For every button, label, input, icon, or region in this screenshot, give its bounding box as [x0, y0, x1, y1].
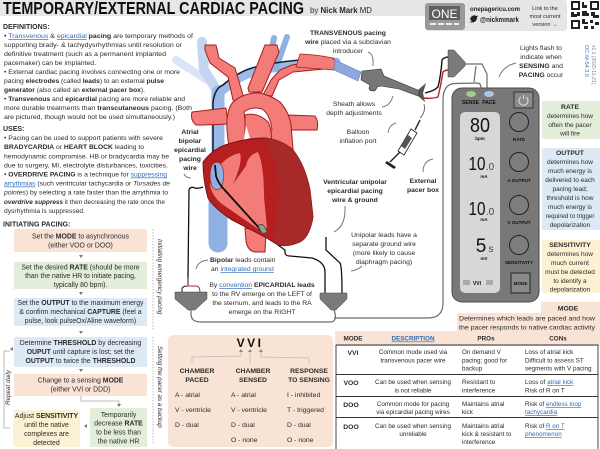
- row: DOO: DOO: [343, 402, 359, 409]
- flow box: adjust sensitivity: Adjust SENSITIVITY: [15, 413, 78, 420]
- row: DDD: phenomenon: [525, 431, 562, 438]
- row: DDD: Can be used when sensing: [375, 423, 451, 430]
- panel: output: [542, 148, 600, 230]
- panel: output: required to trigger: [546, 213, 594, 220]
- row: VOO: Resistant to: [462, 379, 496, 386]
- mode button: MODE: [514, 281, 527, 286]
- label: atrial bipolar wire: Atrial: [181, 129, 199, 136]
- flow box: change mode: (either VVI or DDD): [51, 386, 110, 394]
- table header: DESCRIPTION: [391, 336, 435, 342]
- row: VOO: is not reliable: [394, 388, 432, 394]
- side label: setting pacer as a backup: [153, 337, 163, 445]
- panel: output: pacing lead;: [552, 186, 588, 193]
- knob: sensitivity: SENSITIVITY: [505, 260, 533, 265]
- column: response to sensing: I - inhibited: [287, 392, 320, 399]
- label: convention epicardial: the sternum, and leads to the RA: [212, 300, 312, 307]
- pacer box: [452, 88, 539, 302]
- label: ventricular unipolar: epicardial pacing: [327, 188, 383, 195]
- row: DOO: tachycardia: [525, 409, 558, 416]
- panel: mode: Determines which leads are paced and how: [459, 316, 595, 322]
- panel: rate: determines how: [547, 113, 593, 120]
- row: VVI: transvenous pacer wire: [380, 358, 446, 364]
- flow box: set output: pulse, look pulseOx/Aline waveform): [25, 318, 136, 325]
- column: response to sensing: D - dual: [287, 422, 311, 429]
- knob: rate: RATE: [513, 137, 525, 142]
- panel: mode: the pacer responds to native cardiac activity: [459, 324, 596, 332]
- table header: CONs: [549, 336, 567, 342]
- flow arrows: [4, 255, 121, 428]
- row: DOO: Common mode for pacing: [377, 401, 450, 408]
- knob: v output: V OUTPUT: [507, 220, 531, 225]
- flow box: decrease rate: the native HR: [98, 438, 139, 446]
- version text: OC-M-54.3.0: [583, 45, 589, 77]
- row: VOO: interference: [462, 388, 496, 394]
- label: sheath: Sheath allows: [333, 101, 376, 108]
- column: response to sensing: T - triggered: [287, 407, 324, 414]
- row: DDD: unreliable: [399, 431, 427, 438]
- flow box: decrease rate: decrease RATE: [94, 420, 143, 428]
- row: DDD: interference: [462, 439, 496, 446]
- knob: rate: [510, 112, 528, 142]
- display: VVI: [473, 281, 482, 287]
- display: mV: [480, 256, 488, 261]
- text block: uses: overdrive suppress it then decreasing the rate once the: [4, 199, 165, 206]
- label: unipolar leads: diaphragm pacing): [356, 259, 412, 266]
- label: sheath: depth adjustments: [326, 110, 382, 117]
- row: DDD: Maintains atrial: [462, 423, 504, 430]
- power button: [514, 92, 533, 108]
- flow box: change mode: Change to a sensing MODE: [38, 378, 124, 384]
- side label: setting pacer as a backup: Setting the pacer as a backup: [156, 346, 163, 428]
- display: mA: [480, 217, 488, 222]
- column: response to sensing: O - none: [287, 437, 314, 444]
- label: convention epicardial: By convention EPICARDIAL leads: [209, 282, 315, 289]
- illustration: heart: [203, 138, 313, 246]
- text block: uses: BRADYCARDIA or HEART BLOCK leading to: [4, 144, 144, 151]
- display: 5: [476, 236, 486, 257]
- panel: VVI code: [168, 335, 333, 447]
- display: [460, 112, 500, 293]
- knob: a output: [507, 152, 531, 183]
- flow box: set rate: typically 80 bpm).: [54, 282, 107, 289]
- row: DOO: Risk of endless loop: [525, 401, 582, 408]
- flow box: set output: [14, 298, 147, 326]
- text block: uses: • OVERDRIVE PACING is a technique for suppressing: [4, 172, 167, 178]
- main gray cable loop: [191, 64, 487, 322]
- label: atrial bipolar wire: [174, 129, 206, 178]
- table header: MODE: [344, 336, 362, 342]
- row: DDD: DOO: [343, 424, 359, 431]
- text block: definitions: more durable treatments than transcutaneous pacing. (Both: [4, 105, 192, 112]
- label: sheath: [326, 96, 393, 117]
- row: VOO: [343, 379, 574, 394]
- link text: version →: [532, 22, 558, 28]
- text block: definitions: • Transvenous & epicardial pacing are temporary methods of: [4, 33, 193, 40]
- panel: sensitivity: SENSITIVITY: [549, 242, 591, 249]
- column: response to sensing: [287, 368, 330, 444]
- mode button: [511, 273, 530, 293]
- row: DOO: Maintains atrial: [462, 401, 504, 408]
- panel: output: determines how: [547, 159, 593, 166]
- label: external pacer box: pacer box: [407, 187, 439, 194]
- pace light: PACE: [482, 100, 496, 106]
- label: bipolar leads: [196, 257, 276, 273]
- flow box: decrease rate: Temporarily: [101, 412, 137, 419]
- panel: rate: [542, 101, 600, 139]
- flow box: determine threshold: OUTPUT to twice the THRESHOLD: [26, 358, 135, 365]
- column: chamber sensed: D - dual: [231, 422, 255, 429]
- panel: rate: often the pacer: [548, 122, 593, 129]
- label: lights flash: Lights flash to: [520, 45, 562, 52]
- label: bipolar leads: an integrated ground: [211, 266, 274, 273]
- panel: sensitivity: depolarization: [550, 286, 591, 294]
- text block: definitions: DEFINITIONS:: [3, 24, 50, 31]
- row: DDD: Risk of R on T: [525, 423, 565, 430]
- header band: [0, 0, 567, 31]
- row: DOO: [343, 401, 582, 416]
- flow box: decrease rate: [90, 408, 147, 447]
- panel: output: OUTPUT: [556, 150, 585, 157]
- label: atrial bipolar wire: epicardial: [174, 147, 206, 154]
- table header: [344, 336, 567, 342]
- website and twitter handle: @nickmmark: [480, 17, 519, 24]
- illustration: sheath and connector: [296, 50, 465, 118]
- sense light: [462, 91, 480, 106]
- column: response to sensing: RESPONSE: [290, 368, 328, 375]
- column: chamber sensed: O - none: [231, 437, 258, 444]
- table: modes: [336, 336, 598, 449]
- column: chamber paced: V - ventricle: [175, 407, 211, 414]
- text block: definitions: generator (also called an external pacer box).: [4, 87, 145, 94]
- label: external pacer box: [407, 159, 439, 194]
- heading: initiating pacing: INITIATING PACING:: [3, 222, 70, 228]
- row: VVI: Common mode used via: [379, 349, 448, 356]
- text block: uses: due to surgery, MI, electrolyte disturbances, toxicities.: [4, 162, 168, 170]
- row: VOO: Risk of R on T: [525, 388, 565, 394]
- column: chamber sensed: A - atrial: [231, 392, 256, 399]
- text block: uses: • Pacing can be used to support patients with severe: [4, 135, 163, 142]
- knob: sensitivity: [505, 236, 533, 265]
- label: ventricular unipolar: wire & ground: [331, 197, 378, 204]
- flow box: decrease rate: to be less than: [96, 430, 141, 436]
- labels: transvenous wire: wire placed via a subclavian: [304, 39, 391, 46]
- website and twitter handle: onepagericu.com: [470, 6, 520, 13]
- label: balloon port: Balloon: [347, 129, 370, 136]
- panel: output: delivered to each: [545, 177, 595, 184]
- column: chamber sensed: SENSED: [239, 377, 267, 384]
- label: bipolar leads: Bipolar leads contain: [210, 257, 276, 264]
- column: chamber sensed: [231, 368, 270, 444]
- label: atrial bipolar wire: wire: [182, 165, 197, 172]
- connector: right lead: [320, 293, 347, 310]
- label: convention epicardial: emerge on the RIGHT: [229, 309, 295, 316]
- label: external pacer box: External: [410, 178, 437, 185]
- panel: mode: [335, 302, 600, 346]
- pace light: [482, 91, 496, 106]
- display: 80: [470, 115, 490, 137]
- connector: left lead: [175, 277, 207, 310]
- text block: definitions: are pictured, though would not be used simultaneously.): [4, 114, 175, 121]
- label: unipolar leads: separate ground wire: [352, 241, 416, 248]
- display: 10: [468, 199, 486, 219]
- badge: ONE: ONE: [431, 7, 458, 21]
- column: chamber paced: CHAMBER: [180, 368, 214, 375]
- text block: uses: hemodynamic compromise. HB or bradycardia may be: [4, 154, 169, 160]
- flow box: determine threshold: OUPUT until capture is lost; set the: [27, 349, 134, 356]
- row: VVI: [348, 349, 592, 372]
- website and twitter handle: [469, 6, 520, 24]
- row: VOO: VOO: [343, 380, 359, 387]
- side label: initiating emergency pacing: [153, 229, 163, 330]
- flow box: set output: & confirm mechanical CAPTURE (feel a: [19, 309, 142, 316]
- text block: uses: pointes) by selecting a rate faster than the arrythmia to: [3, 190, 168, 196]
- display: 10: [468, 154, 486, 174]
- illustration: vessel under heart: [245, 228, 266, 252]
- column: chamber paced: D - dual: [175, 422, 199, 429]
- text block: definitions: definitive treatment (such as a permanent implanted: [4, 51, 166, 58]
- table header: PROs: [477, 336, 495, 342]
- row: VVI: pacing; good for: [462, 358, 507, 364]
- row: VOO: Can be used when sensing: [375, 379, 451, 386]
- flow box: adjust sensitivity: detected: [33, 440, 60, 447]
- label: lights flash: PACING occur: [519, 72, 564, 79]
- illustration: great vessels: [192, 45, 336, 160]
- row: VVI: VVI: [348, 350, 359, 357]
- label: ventricular unipolar: [323, 179, 387, 232]
- ventricular wire to connector: [278, 245, 325, 293]
- panel: rate: will fire: [559, 130, 580, 138]
- display: bpm: [475, 136, 485, 141]
- text block: definitions: pacing electrodes (called leads) to an external pulse: [4, 78, 164, 85]
- text block: definitions: • External cardiac pacing involves connecting one or more: [4, 69, 180, 76]
- labels: transvenous wire: [304, 30, 391, 66]
- row: VOO: Loss of atrial kick: [525, 379, 574, 386]
- panel: mode: MODE: [558, 306, 579, 312]
- text block: definitions: pacemaker) can be implanted.: [4, 60, 96, 67]
- flow box: adjust sensitivity: [13, 410, 80, 447]
- column: chamber paced: PACED: [185, 377, 209, 384]
- flow box: set mode: Set the MODE to asynchronous: [32, 234, 130, 240]
- label: balloon port: inflation port: [339, 138, 377, 145]
- row: DDD: kick & resistant to: [462, 431, 512, 438]
- row: DDD: [343, 423, 565, 446]
- link text: most current: [529, 14, 561, 20]
- row: VVI: On demand V: [462, 349, 502, 356]
- labels: transvenous wire: introducer: [333, 48, 364, 55]
- display: .0: [486, 162, 495, 173]
- panel: sensitivity: much current: [551, 260, 589, 267]
- display: .0: [486, 207, 495, 218]
- row: VVI: segments with V pacing: [525, 366, 592, 372]
- flow box: set rate: Set the desired RATE (should be more: [21, 264, 140, 272]
- flow box: change mode: [14, 374, 147, 396]
- column: response to sensing: TO SENSING: [288, 377, 330, 384]
- knob: a output: A OUTPUT: [507, 178, 531, 183]
- flow box: set mode: [14, 229, 147, 252]
- author byline: by Nick Mark MD: [310, 6, 372, 15]
- flow box: set rate: than the native HR to initiate pacing,: [25, 273, 136, 280]
- label: unipolar leads: Unipolar leads have a: [351, 232, 417, 239]
- text block: uses: USES:: [3, 126, 24, 133]
- label: convention epicardial: [209, 282, 315, 316]
- ventricular ground wire: [326, 237, 342, 293]
- row: DOO: kick: [462, 409, 474, 416]
- illustration: transvenous wire in vein: [213, 60, 300, 170]
- flow box: set mode: (either VOO or DOO): [48, 242, 113, 250]
- atrial epicardial wire to connector: [188, 187, 203, 277]
- column: chamber sensed: V - ventricle: [231, 407, 267, 414]
- panel: sensitivity: [542, 240, 600, 294]
- label: lights flash: SENSING and: [519, 63, 563, 70]
- column: chamber sensed: CHAMBER: [236, 368, 270, 375]
- panel: VVI code: VVI: [237, 336, 263, 350]
- panel: rate: RATE: [561, 104, 579, 111]
- column: chamber paced: A - atrial: [175, 392, 200, 399]
- row: VVI: Difficult to assess ST: [525, 358, 584, 364]
- version text: v1.1 (2020-11-21): [590, 45, 596, 85]
- knob: v output: [507, 196, 531, 225]
- link text: Link to the: [532, 6, 558, 12]
- panel: sensitivity: to identify a: [553, 278, 587, 285]
- display: s: [488, 244, 494, 255]
- flow box: set output: Set the OUTPUT to the maximum energy: [17, 300, 144, 307]
- text block: definitions: [3, 24, 193, 121]
- label: convention epicardial: to the RV emerge on the LEFT of: [212, 291, 312, 298]
- badge: ONE: [425, 3, 465, 30]
- text block: definitions: • Transvenous and epicardial pacing are more reliable and: [4, 96, 185, 103]
- label: lights flash: [499, 45, 564, 79]
- text block: uses: arrythmias (such ventricular tachycardia or Torsades de: [4, 180, 170, 188]
- panel: sensitivity: must be detected: [545, 269, 595, 276]
- display: mA: [480, 174, 488, 179]
- label: balloon port: [339, 123, 396, 145]
- link text: [529, 6, 561, 28]
- QR code: [570, 0, 600, 30]
- panel: output: much energy is: [548, 168, 593, 175]
- illustration: syringe: [385, 120, 420, 169]
- sense light: SENSE: [462, 100, 480, 106]
- row: VVI: Loss of atrial kick: [525, 349, 574, 356]
- panel: output: threshold is how: [547, 195, 594, 202]
- side label: initiating emergency pacing: Initiating emergency pacing: [156, 239, 163, 315]
- label: lights flash: indicate when: [520, 54, 562, 61]
- illustration: veins: [176, 37, 336, 243]
- flow box: adjust sensitivity: until the native: [24, 422, 69, 429]
- flow box: adjust sensitivity: complexes are: [24, 431, 69, 438]
- label: unipolar leads: (more likely to cause: [353, 250, 415, 257]
- row: DOO: via epicardial pacing wires: [376, 409, 450, 416]
- panel: output: much energy is: [548, 204, 593, 211]
- label: unipolar leads: [351, 232, 417, 271]
- text block: uses: dysrhythmia is suppressed.: [4, 208, 85, 215]
- panel: output: depolarization: [550, 222, 591, 229]
- label: atrial bipolar wire: pacing: [179, 156, 201, 163]
- flow box: set rate: [14, 262, 147, 289]
- version text: [583, 45, 596, 85]
- label: atrial bipolar wire: bipolar: [179, 138, 202, 145]
- label: ventricular unipolar: Ventricular unipolar: [323, 179, 387, 186]
- label: repeat daily: Repeat daily: [5, 369, 12, 405]
- flow box: determine threshold: [14, 337, 147, 367]
- flow box: determine threshold: Determine THRESHOLD by decreasing: [20, 340, 141, 347]
- text block: definitions: supporting brady- & tachydysrhythmias until resolution or: [4, 42, 183, 49]
- text block: uses: [3, 126, 170, 215]
- row: VVI: backup: [462, 366, 483, 372]
- column: chamber paced: [175, 368, 214, 429]
- labels: transvenous wire: TRANSVENOUS pacing: [310, 30, 386, 37]
- panel: sensitivity: determines how: [547, 251, 593, 258]
